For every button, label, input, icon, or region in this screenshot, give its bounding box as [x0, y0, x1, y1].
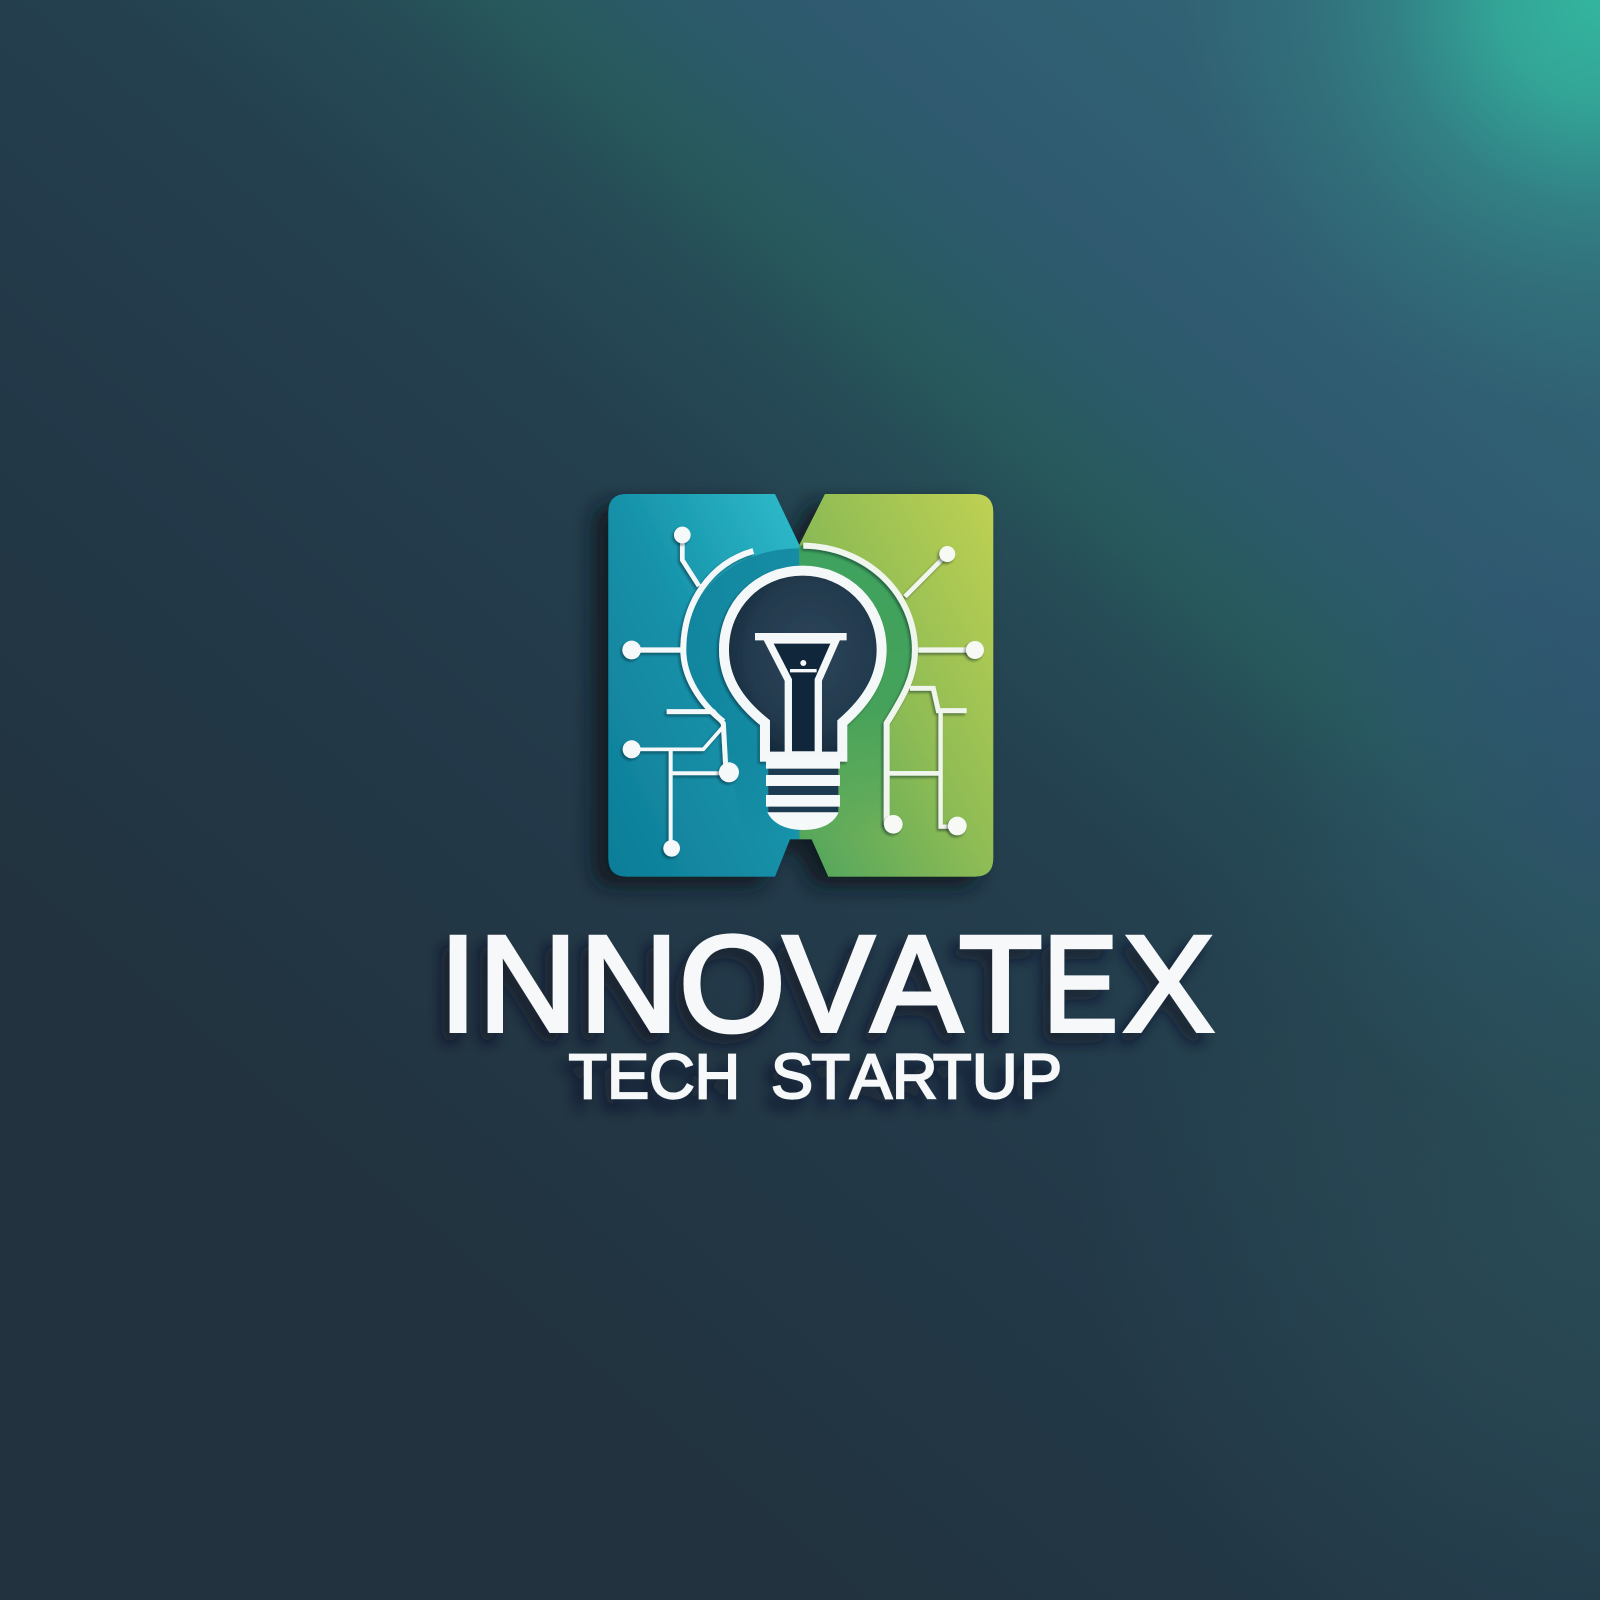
panel: green right half	[799, 494, 993, 877]
brand name: T	[959, 908, 1042, 1061]
tagline: U	[972, 1042, 1018, 1112]
filament	[755, 637, 847, 755]
circuit nodes left	[622, 527, 739, 857]
brand name: A	[871, 908, 963, 1061]
bulb screw base	[766, 757, 840, 830]
bulb glass	[724, 571, 882, 757]
circuit traces left	[632, 535, 753, 848]
brand name: N	[579, 908, 678, 1061]
brand name: X	[1123, 908, 1214, 1061]
circuit nodes right	[884, 546, 984, 835]
panel: teal left half	[608, 494, 799, 877]
tagline: S	[771, 1042, 813, 1112]
logo mark	[608, 494, 993, 877]
tagline: P	[1020, 1042, 1062, 1112]
tagline: A	[850, 1042, 892, 1112]
brand name: V	[783, 908, 874, 1061]
brand name: E	[1043, 908, 1118, 1061]
inner shaded teal band	[685, 548, 799, 839]
brand name: O	[679, 908, 786, 1061]
tagline: T	[933, 1042, 971, 1112]
tagline: TECH	[569, 1042, 740, 1112]
inner green arc band	[799, 546, 915, 839]
circuit traces right	[803, 546, 973, 827]
tagline: R	[892, 1042, 938, 1112]
logo panels	[608, 494, 993, 877]
tagline: T	[812, 1042, 850, 1112]
icon: light bulb	[724, 571, 882, 830]
brand name: N	[478, 908, 577, 1061]
brand name: I	[439, 908, 477, 1061]
